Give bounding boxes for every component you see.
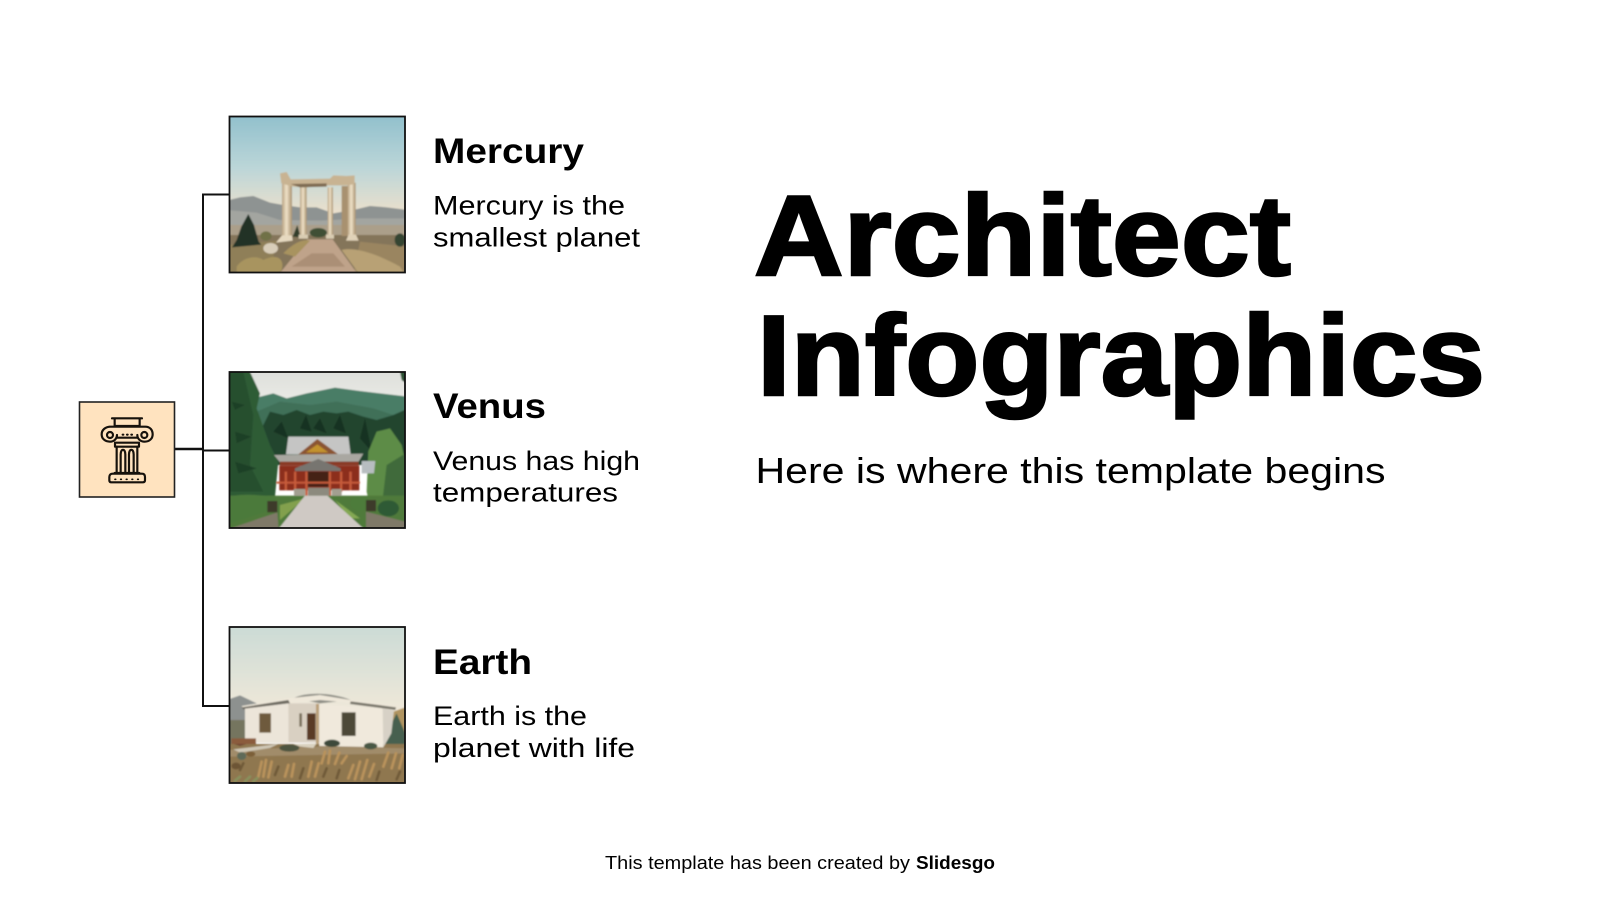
icon: ionic column [102,418,153,482]
description: Mercury: smallest planet [433,222,641,252]
footer credit: Slidesgo [916,852,995,873]
dry grass [235,751,403,781]
description: Venus: temperatures [433,478,618,508]
photo: ancient ruins [227,113,408,275]
text block: Venus [433,387,640,508]
description: Mercury: Mercury is the [433,190,625,220]
description: Earth: Earth is the [433,701,587,731]
description: Venus: Venus has high [433,446,640,476]
text block: Mercury [433,132,641,252]
description: Venus [433,446,640,508]
heading: Venus: Venus [433,387,546,426]
footer credit: This template has been created by [605,852,911,873]
path [278,496,364,529]
heading: Earth: Earth [433,643,532,682]
connector lines [174,194,230,706]
description: Earth [433,701,635,763]
photo: white house [227,623,408,786]
lanterns and walls [267,501,277,512]
photo: red temple [227,368,408,529]
columns [342,186,348,236]
right tree [366,428,404,497]
temple [286,437,351,454]
title: Architect [754,173,1291,300]
heading: Mercury: Mercury [433,132,585,171]
icon box: column [80,402,174,497]
text block: Earth [433,643,635,763]
title [754,173,1485,420]
house [294,694,351,703]
subtitle: Here is where this template begins [756,450,1386,491]
ground [227,496,408,529]
description: Earth: planet with life [433,733,635,763]
title: Infographics [757,293,1485,420]
description: Mercury [433,190,641,252]
main tree left [230,372,279,497]
